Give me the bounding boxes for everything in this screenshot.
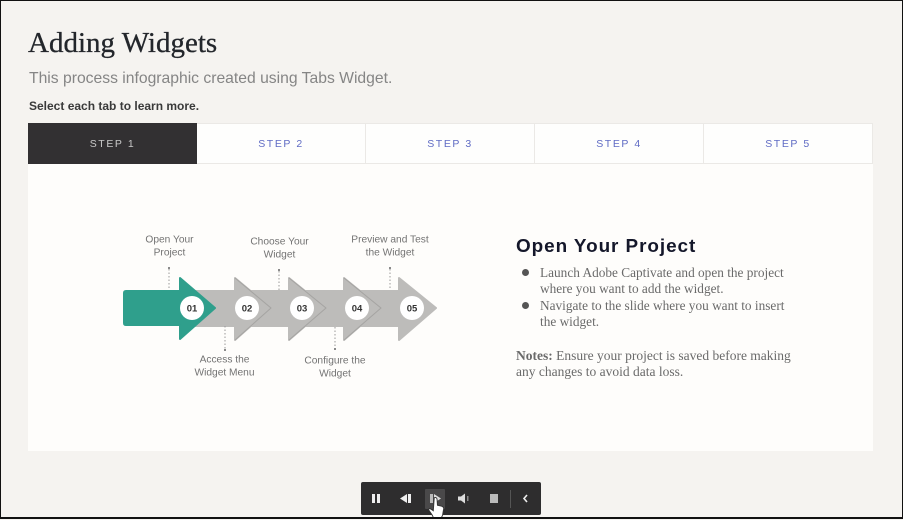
label: access the widget menu: Widget Menu bbox=[194, 368, 255, 378]
connector 5 bbox=[389, 267, 391, 290]
notes bbox=[516, 348, 791, 379]
process arrow diagram bbox=[123, 234, 437, 380]
instruction: Select each tab to learn more. bbox=[29, 99, 199, 113]
subtitle: This process infographic created using Tabs Widget. bbox=[29, 70, 392, 87]
bullet 1: where you want to add the widget. bbox=[540, 281, 724, 296]
tab: step 4: STEP 4 bbox=[596, 138, 642, 150]
tab: step 2: STEP 2 bbox=[258, 138, 304, 150]
step 02 badge bbox=[235, 296, 259, 320]
bullet 2: Navigate to the slide where you want to insert bbox=[540, 298, 784, 313]
step 02 badge: 02 bbox=[242, 304, 252, 314]
label: open your project: Open Your bbox=[145, 234, 194, 246]
notes: any changes to avoid data loss. bbox=[516, 364, 683, 379]
title: Adding Widgets bbox=[28, 27, 217, 59]
icon: collapse chevron bbox=[524, 495, 527, 502]
connector 4 bbox=[334, 327, 336, 350]
tab: step 4 bbox=[535, 123, 704, 164]
bullet list bbox=[522, 265, 784, 329]
bullet 1: Launch Adobe Captivate and open the project bbox=[540, 265, 784, 280]
arrow 5 bbox=[360, 278, 436, 340]
tab: step 5: STEP 5 bbox=[765, 138, 811, 150]
tab: step 3 bbox=[366, 123, 535, 164]
step 03 badge bbox=[290, 296, 314, 320]
connector 3 bbox=[278, 269, 280, 290]
content panel bbox=[28, 164, 873, 451]
arrow 4 bbox=[305, 278, 381, 340]
step 04 badge: 04 bbox=[352, 304, 363, 314]
arrow 1 bbox=[124, 278, 215, 339]
icon: pause bbox=[372, 494, 380, 503]
tab: step 1: STEP 1 bbox=[90, 138, 135, 150]
step 05 badge: 05 bbox=[407, 304, 418, 314]
bullet 2: the widget. bbox=[540, 314, 599, 329]
icon: next highlighted bbox=[425, 489, 445, 509]
step heading: Open Your Project bbox=[516, 236, 696, 257]
step 04 badge bbox=[345, 296, 369, 320]
notes: Notes: Ensure your project is saved before making bbox=[516, 348, 791, 362]
step 01 badge: 01 bbox=[187, 304, 198, 314]
label: access the widget menu: Access the bbox=[200, 354, 249, 366]
bullet 2 bbox=[522, 298, 784, 329]
label: preview and test: the Widget bbox=[366, 248, 415, 258]
tab: step 5 bbox=[704, 123, 873, 164]
tab: step 2 bbox=[197, 123, 366, 164]
playback toolbar bbox=[361, 482, 541, 515]
arrow 3 bbox=[250, 278, 326, 340]
label: choose your widget: Widget bbox=[264, 250, 296, 260]
step 05 badge bbox=[400, 296, 424, 320]
label: open your project: Project bbox=[154, 248, 186, 258]
label: configure the widget: Widget bbox=[319, 368, 351, 380]
tab: step 3: STEP 3 bbox=[427, 138, 473, 150]
arrow 2 bbox=[195, 278, 271, 340]
step 03 badge: 03 bbox=[297, 304, 307, 314]
step 01 badge bbox=[180, 296, 204, 320]
icon: volume bbox=[458, 494, 468, 504]
tab bar bbox=[28, 123, 873, 164]
label: configure the widget: Configure the bbox=[304, 356, 366, 366]
cursor hand bbox=[428, 497, 444, 517]
icon: stop bbox=[490, 494, 498, 503]
label: preview and test: Preview and Test bbox=[351, 234, 429, 246]
bullet 1 bbox=[522, 265, 784, 296]
connector 2 bbox=[224, 326, 226, 351]
icon: rewind bbox=[400, 494, 411, 503]
label: choose your widget: Choose Your bbox=[250, 236, 309, 248]
tab: step 1 bbox=[28, 123, 197, 164]
connector 1 bbox=[168, 267, 170, 290]
